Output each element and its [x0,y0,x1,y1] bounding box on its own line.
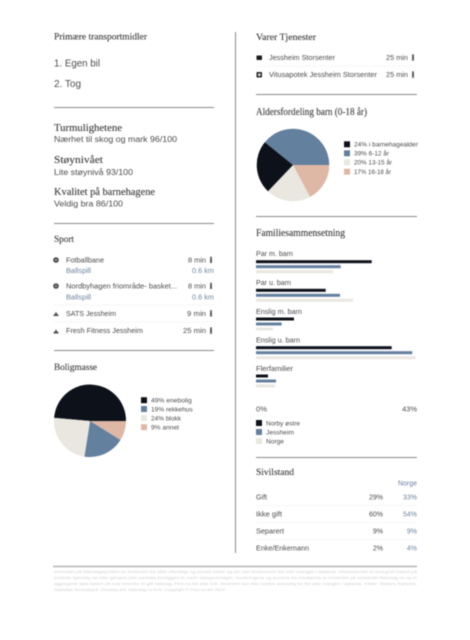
row: SATS [54,310,212,318]
bar group: Par m. barn [256,251,372,273]
heading: housing: Boligmasse [54,363,97,373]
axis labels [256,406,417,414]
legend: family composition: Jessheim [266,430,294,437]
row: Enke/Enkemann: 4% [407,546,417,552]
legend: age distribution: 39% 6-12 år [354,150,390,158]
row: Ikke gift: 54% [403,512,417,518]
row: Fresh Fitness: 25 min [183,328,206,335]
row: Separert: 9% [407,528,417,536]
legend: family composition [256,420,300,446]
row: Fotballbane: Ballspill [66,268,91,275]
pie chart: age distribution [257,129,329,201]
footer disclaimer: korteste kjøretøy vei eller gangvei (der kartdata foreligger) er med i datagrunnlaget. Vurderingene og scorene fra lokalkjente er innhentet på nettstedet Nabolag.no og er [54,575,418,580]
panel: neighbourhood ratings [54,122,178,208]
row: Jessheim Storsenter: Jessheim Storsenter [269,55,336,62]
legend: housing: 19% rekkehus [151,406,193,413]
bar group: Flerfamilier [256,366,294,388]
panel: age distribution [256,107,419,201]
row: Fotballbane: 0.6 km [192,268,214,275]
heading: family composition: Familiesammensetning [256,228,345,239]
row: Fotballbane [53,257,214,275]
heading: sport: Sport [54,234,74,244]
rating: hiking: Nærhet til skog og mark 96/100 [54,135,178,144]
footer disclaimer: Statistisk Sentralbyrå, Geodata AS, Nabolag.no H.R. Copyright © Finn.no AS 2024 [54,587,226,592]
row: Fresh Fitness: Fresh Fitness Jessheim [66,328,143,335]
row: Fotballbane: Fotballbane [66,258,104,264]
axis labels: 0% [256,406,267,414]
pie chart: housing [54,385,126,457]
legend: age distribution: 20% 13-15 år [354,159,393,167]
row: Fotballbane: 8 min [188,258,206,264]
panel: marital status [256,468,417,552]
rating: kindergarten: Veldig bra 86/100 [54,200,124,208]
bar group: Enslig u. barn [256,338,416,359]
row: Gift [256,494,417,502]
row: Enke/Enkemann [256,546,417,552]
footer disclaimer: aggregerte data basert på svar innenfor et gitt nabolag. Finn.no AS eller EIE Jessheim kan ikke holdes ansvarlig for feil eller mangler i dataene. Kilder: Statens Kartverk, [54,581,417,586]
legend: housing: 49% enebolig [151,398,192,405]
transport option 1: 1. Egen bil [54,58,100,70]
panel: family composition [256,228,417,446]
heading: age distribution: Aldersfordeling barn (0-18 år) [256,107,367,118]
row: Jessheim Storsenter [256,54,414,62]
legend: family composition: Norby østre [266,421,300,428]
bar group: Par u. barn [256,280,353,302]
column label: Norge: Norge [398,480,417,488]
bar group: Enslig m. barn: Enslig m. barn [256,309,302,316]
row: SATS: SATS Jessheim [66,311,116,318]
heading: transport: Primære transportmidler [54,32,147,42]
row: Fresh Fitness [54,327,212,335]
panel: housing [54,363,193,457]
rating: noise: Lite støynivå 93/100 [54,168,134,177]
heading: noise: Støynivået [54,154,103,166]
legend: age distribution: 17% 16-18 år [354,168,392,176]
footer disclaimer: Innholdet på Nabolagsprofilen er innhentet fra ulike offentlige og private kilder og det kan forekomme feil eller mangler i dataene. Distansen/tid er beregnet basert på [54,569,418,574]
row: Jessheim Storsenter: 25 min [386,55,408,62]
legend: age distribution [344,141,419,176]
axis labels: 43% [402,406,417,414]
row: Ikke gift: 60% [369,512,383,518]
heading: goods and services: Varer Tjenester [256,33,317,43]
row: Separert [256,528,417,536]
bar group: Par m. barn: Par m. barn [256,251,293,258]
panel: primary transport [54,32,147,90]
bar group: Par u. barn: Par u. barn [256,280,291,287]
heading: kindergarten: Kvalitet på barnehagene [54,186,155,198]
panel: goods and services [256,33,417,79]
bar group: Enslig m. barn [256,309,302,330]
row: SATS: 9 min [187,311,206,318]
row: Gift: Gift [256,494,267,502]
row: Separert: Separert [256,528,284,536]
heading: marital status: Sivilstand [256,468,294,478]
row: Vitusapotek [256,71,414,79]
heading: hiking: Turmulighetene [54,122,122,134]
transport option 2: 2. Tog [54,78,81,90]
row: Nordbyhagen: 8 min [188,284,206,290]
panel: sport [53,234,214,335]
footer disclaimer [54,569,418,592]
row: Gift: 33% [403,494,417,502]
row: Nordbyhagen: 0.6 km [192,294,214,302]
row: Nordbyhagen: Nordbyhagen friområde- basket... [66,282,177,290]
row: Separert: 9% [373,528,383,536]
row: Gift: 29% [369,494,383,502]
bar group: Enslig u. barn: Enslig u. barn [256,338,300,345]
bar group: Flerfamilier: Flerfamilier [256,366,294,373]
legend: housing: 24% blokk [151,415,182,422]
legend: housing [141,397,193,432]
row: Ikke gift [256,512,417,518]
row: Enke/Enkemann: Enke/Enkemann [256,546,309,552]
legend: family composition: Norge [266,439,284,446]
row: Vitusapotek: Vitusapotek Jessheim Storsenter [269,72,378,79]
row: Enke/Enkemann: 2% [373,546,383,552]
row: Nordbyhagen [53,282,214,302]
row: Ikke gift: Ikke gift [256,512,282,518]
row: Vitusapotek: 25 min [386,72,408,79]
legend: housing: 9% annet [151,425,179,432]
legend: age distribution: 24% i barnehagealder [354,142,419,149]
row: Nordbyhagen: Ballspill [66,294,91,302]
